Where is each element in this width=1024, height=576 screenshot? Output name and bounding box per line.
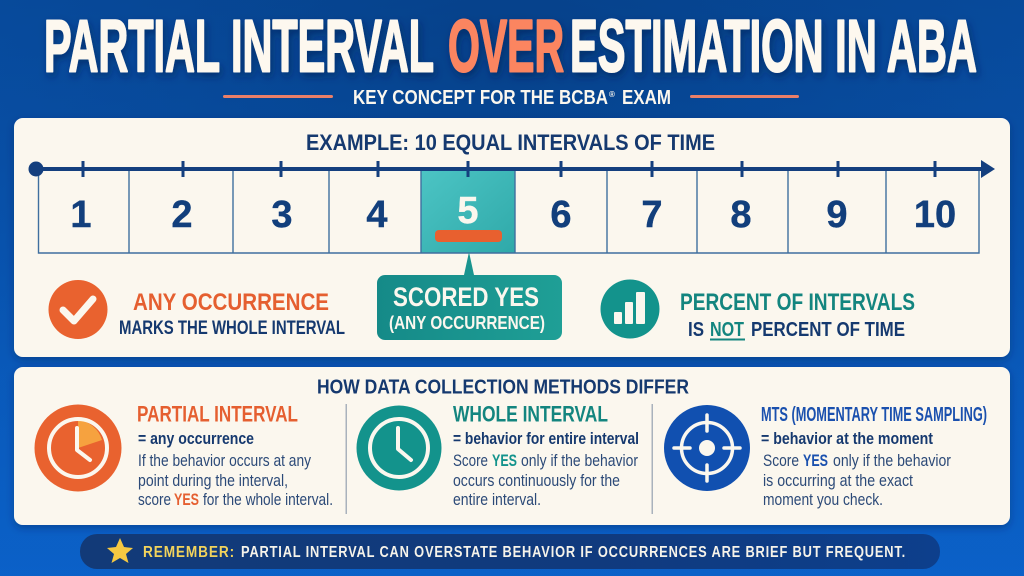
icon: partial interval clock [34,404,122,492]
icon: check mark [48,280,108,339]
highlighted interval 5 [421,171,515,253]
text: percent of intervals [680,289,915,341]
reminder bar [80,534,940,569]
timeline arrow [28,160,995,178]
method: whole interval: Score [453,452,488,470]
interval numbers: 7 [641,194,663,236]
interval numbers: 9 [826,194,848,236]
method: partial interval [137,402,333,509]
interval boxes [38,171,979,253]
subtitle: ® [609,90,615,99]
method: partial interval: point during the interval, [138,472,288,490]
callout: scored yes [377,252,562,340]
method: momentary time sampling: is occurring at the exact [763,472,913,490]
interval numbers: 8 [730,194,752,236]
subtitle: EXAM [622,87,671,109]
subtitle [223,87,799,109]
interval numbers: 10 [914,194,956,236]
method: whole interval: only if the behavior [521,452,638,470]
interval numbers: 5 [457,190,479,232]
divider [346,404,347,514]
title: OVER [448,4,564,88]
method: partial interval: for the whole interval. [203,491,333,509]
interval numbers: 6 [550,194,572,236]
method: partial interval: If the behavior occurs at any [138,452,312,470]
icon: whole interval clock [356,406,442,490]
method: whole interval: = behavior for entire interval [453,430,639,448]
heading: methods: HOW DATA COLLECTION METHODS DIFFER [317,376,689,398]
method: partial interval: = any occurrence [138,430,254,448]
method: whole interval [453,402,639,509]
panel: data collection methods [14,367,1010,525]
text: percent of intervals: PERCENT OF TIME [751,318,905,341]
method: momentary time sampling: moment you check. [763,491,883,509]
method: partial interval: PARTIAL INTERVAL [137,402,298,426]
text: any occurrence: MARKS THE WHOLE INTERVAL [119,317,345,339]
method: momentary time sampling: Score [763,452,799,470]
callout: scored yes: SCORED YES [393,282,539,312]
method: momentary time sampling: = behavior at the moment [761,430,933,448]
interval numbers: 2 [171,194,193,236]
text: percent of intervals: IS [688,318,704,341]
method: partial interval: score [138,491,171,509]
method: whole interval: YES [492,452,517,470]
icon: target [664,405,750,491]
icon: bar chart [600,280,660,338]
interval numbers: 3 [271,194,293,236]
heading: example: EXAMPLE: 10 EQUAL INTERVALS OF TIME [306,130,715,155]
text: percent of intervals: PERCENT OF INTERVALS [680,289,915,316]
subtitle: KEY CONCEPT FOR THE BCBA [353,87,608,109]
divider [652,404,653,514]
callout: scored yes: (ANY OCCURRENCE) [389,312,545,333]
method: momentary time sampling: YES [803,452,828,470]
interval numbers: 1 [70,194,92,236]
method: whole interval: occurs continuously for the [453,472,620,490]
interval numbers: 4 [366,194,388,236]
method: momentary time sampling: only if the behavior [833,452,951,470]
icon: star [107,538,133,563]
method: partial interval: YES [174,491,199,509]
text: percent of intervals: NOT [710,318,744,341]
method: whole interval: entire interval. [453,491,541,509]
method: momentary time sampling [761,404,987,509]
panel: interval example [14,118,1010,357]
reminder text: PARTIAL INTERVAL CAN OVERSTATE BEHAVIOR IF OCCURRENCES ARE BRIEF BUT FREQUENT. [241,544,906,561]
interval numbers [70,190,956,236]
text: any occurrence [119,289,345,339]
method: whole interval: WHOLE INTERVAL [453,402,608,426]
reminder text: REMEMBER: [143,544,235,561]
text: any occurrence: ANY OCCURRENCE [133,289,329,316]
occurrence marker [435,230,502,242]
title: PARTIAL INTERVAL [44,4,434,88]
